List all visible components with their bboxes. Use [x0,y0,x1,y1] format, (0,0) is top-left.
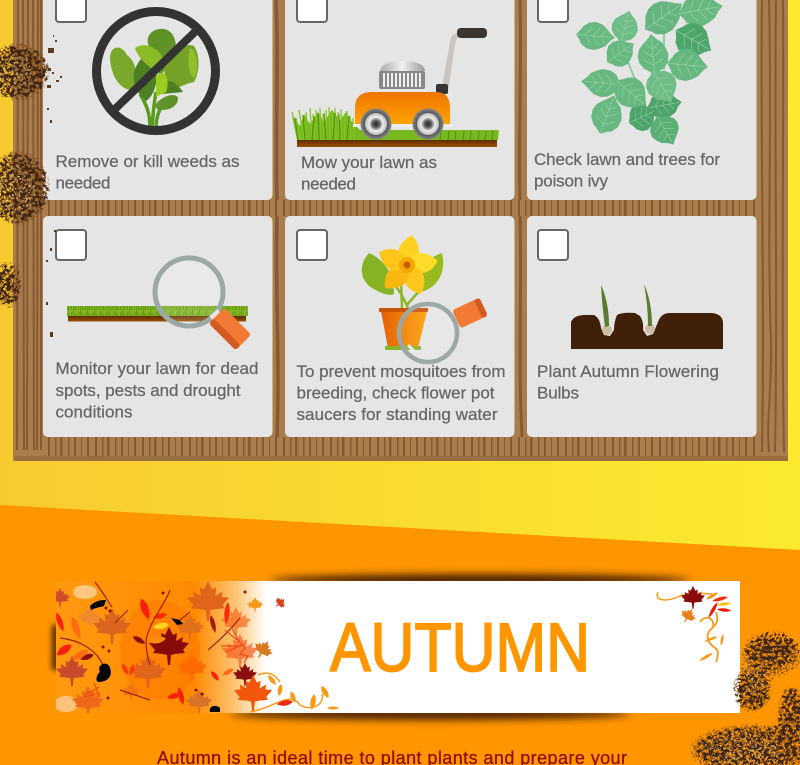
text: mosquitoes: breeding, check flower pot [296,384,495,402]
panel: mow lawn [285,0,514,200]
checkbox [297,0,327,22]
panel: poison ivy [527,0,756,200]
text: mosquitoes: saucers for standing water [296,405,498,424]
text: monitor lawn: conditions [56,402,132,422]
text: mow lawn: needed [301,174,356,194]
icon: lawn mower on grass [292,28,499,147]
panel: plant bulbs [527,216,756,437]
checkbox [297,230,327,260]
text: mow lawn: Mow your lawn as [301,153,437,172]
yellow background [0,0,800,560]
text: plant bulbs: Plant Autumn Flowering [537,362,719,381]
checkbox [56,230,86,260]
text: poison ivy: Check lawn and trees for [534,150,720,169]
text: poison ivy: poison ivy [534,172,608,190]
heading: autumn: AUTUMN [330,609,590,686]
soil scatter: left [0,35,62,337]
icon: soil with sprouting bulbs [571,284,723,349]
banner: autumn [50,581,740,716]
text: remove weeds: Remove or kill weeds as [56,152,240,171]
banner shadow [52,574,690,720]
icon: grass strip under magnifier [67,258,251,350]
orange section background [0,505,800,765]
text: monitor lawn: spots, pests and drought [56,381,241,400]
panel: mosquitoes flower pot [285,216,514,437]
wooden board [13,0,788,461]
checkbox [538,0,568,22]
text: mosquitoes: To prevent mosquitoes from [296,362,506,381]
icon: poison ivy leaves [575,0,726,152]
text: remove weeds: needed [56,174,110,192]
icon: weed with prohibition sign [96,12,216,130]
checkbox [538,230,568,260]
text: monitor lawn: Monitor your lawn for dead [56,359,258,378]
foliage illustration [50,581,339,716]
soil scatter: bottom right [690,632,800,765]
icon: flower pot under magnifier [362,234,488,362]
panel: remove weeds [43,0,272,200]
checkbox [56,0,86,22]
text: plant bulbs: Bulbs [537,384,579,402]
panel: monitor lawn [43,216,272,437]
corner decoration [657,586,731,662]
